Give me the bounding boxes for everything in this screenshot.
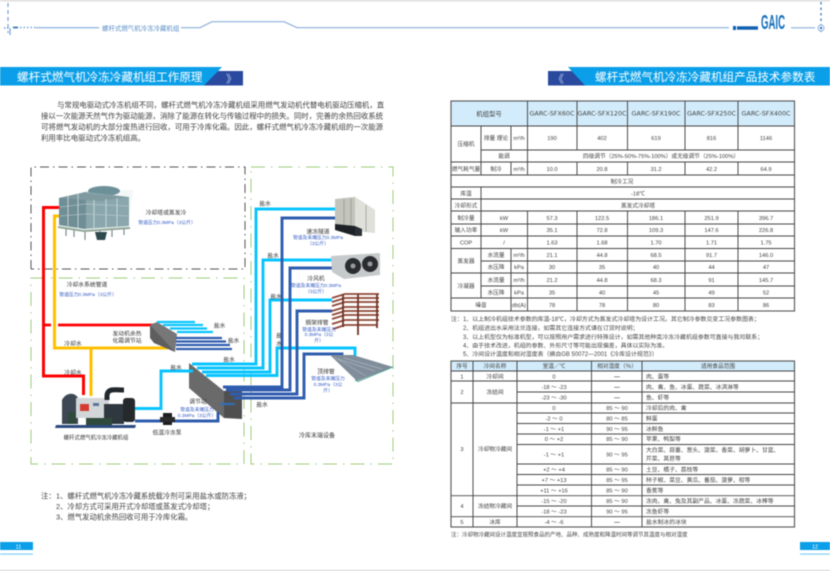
table body values: 水压降 [487, 288, 505, 296]
text block: left notes: 注： [41, 492, 56, 500]
labels: stations and chiller: 调节站 [189, 397, 207, 405]
pipes: cooling water and hot water [44, 208, 168, 396]
labels: terminal equipment: 斤） [323, 387, 333, 394]
labels: terminal equipment: 盐水 [223, 355, 235, 363]
table header row: GARC-SFX400C [742, 110, 791, 118]
table body values: 68.5 [650, 253, 662, 259]
labels: terminal equipment: 顶排管 [317, 367, 335, 375]
second table contents: +2 ～ +4 [543, 468, 565, 474]
table body values: / [503, 240, 505, 246]
heading: left section title bar: 》 [226, 72, 237, 86]
text block: table notes: 1、以上制冷机组技术参数的库温-18℃，冷却方式为蒸发式冷却塔为设计工况。其它制冷参数见变工况参数图表； [463, 315, 760, 323]
text block: table notes: 注： [451, 315, 463, 323]
second table contents: 芹菜、莴苣等 [646, 454, 681, 462]
second table contents: — [614, 396, 620, 402]
table body values: 57.3 [546, 216, 558, 222]
second table contents: 肉、禽、鱼、冰蛋、蔬菜、冰淇淋等 [646, 383, 739, 391]
table body values: db(A) [512, 303, 526, 309]
second table contents: -15 ～ -20 [541, 499, 567, 505]
second table contents: — [614, 385, 620, 391]
table body values: 排量 理论 [484, 134, 508, 142]
icon: shelf coil rack [332, 294, 379, 335]
table body values: 水流量 [487, 276, 505, 284]
table body values: 47 [763, 265, 769, 271]
table body values: 制冷量 [457, 214, 475, 222]
table body values: 86 [763, 303, 769, 309]
second table contents: -1 ～ +1 [544, 427, 564, 433]
table body values: 619 [651, 136, 661, 142]
table body values: 44.8 [596, 253, 608, 259]
second table contents: 2 [460, 390, 464, 396]
table body values: 水压降 [487, 263, 505, 271]
panel: cooling tower zone [31, 167, 245, 269]
table body values: 冷凝器 [457, 282, 475, 290]
labels: terminal equipment: 0.3MPa（3公 [305, 332, 334, 338]
table body values: 1146 [760, 136, 772, 142]
labels: terminal equipment: 冷库末端设备 [299, 431, 335, 439]
table body values: 78 [599, 303, 605, 309]
second table contents: 肉、蛋等 [646, 372, 669, 380]
table body values: 1.75 [760, 240, 772, 246]
labels: terminal equipment: 管道及末端压力 [302, 326, 336, 333]
text block: table notes [451, 315, 763, 358]
second table contents: 室温／℃ [543, 362, 566, 370]
heading: left section title bar [0, 67, 243, 86]
icon: gas engine chiller unit [55, 390, 136, 428]
table body values: kPa [514, 290, 525, 296]
second table contents: 85 ～ 90 [606, 406, 628, 412]
second table contents: 冷却间 [486, 372, 504, 380]
labels: terminal equipment: 盐水 [228, 336, 239, 344]
second table contents: -1 ～ +1 [544, 452, 564, 458]
table body values: 146.0 [759, 253, 773, 259]
labels: cooling zone: 冷却水 [64, 368, 82, 376]
page number: 11 [0, 542, 33, 555]
table body values: kPa [514, 265, 525, 271]
second table contents: 90 ～ 95 [606, 427, 628, 433]
labels: terminal equipment: 水 [276, 339, 282, 347]
table: product technical parameters [451, 101, 794, 311]
table body values: 35 [599, 265, 605, 271]
table body values: 78 [549, 303, 555, 309]
table body values: 压缩机 [457, 140, 475, 148]
text block: table notes: 5、冷间设计温度和相对湿度表（摘自GB 50072—2001《冷库设计规范》） [463, 350, 658, 358]
header: left ornament and running title [4, 3, 729, 35]
table body values: 能调 [498, 152, 510, 160]
text block: table notes: 2、机组进出水采用法兰连接，如需其它连接方式请在订货时说明； [463, 324, 638, 332]
page number: 12: 12 [812, 544, 818, 550]
labels: stations and chiller: 盐水 [170, 363, 182, 371]
second table contents: 4 [460, 504, 464, 510]
second table contents [456, 362, 779, 526]
table body values: 91.7 [706, 253, 717, 259]
second table contents: 土豆、橘子、荔枝等 [646, 466, 698, 474]
second table contents: 柿子椒、菜豆、黄瓜、番茄、菠萝、柑等 [646, 476, 751, 484]
labels: cooling zone: 管道压力0.3MPa（3公斤） [138, 219, 196, 226]
table body values: 输入功率 [455, 226, 478, 234]
table body values: 蒸发器 [457, 257, 475, 265]
table body values: 制冷 [490, 165, 502, 173]
table body values: 蒸发式冷却塔 [621, 202, 655, 210]
second table contents: 冷间名称 [484, 362, 507, 370]
table body values: 1.71 [706, 240, 717, 246]
labels: terminal equipment: 斤） [314, 337, 324, 344]
panel: cold store terminal zone [251, 167, 393, 464]
table header row: GARC-SFX120C [578, 110, 627, 118]
second table contents: 序号 [456, 362, 468, 370]
page number: 12 [800, 542, 830, 555]
second table contents: -23 ～ -30 [541, 396, 567, 402]
second table contents: -18 ～ -23 [541, 510, 567, 516]
table body values: 91 [708, 278, 715, 284]
table body values: 145.7 [759, 278, 773, 284]
table body values: 42.2 [706, 167, 717, 173]
second table contents: 相对湿度（％） [597, 362, 637, 370]
text block: left notes: 2、冷却方式可采用开式冷却塔或蒸发式冷却塔； [56, 502, 214, 511]
labels: terminal equipment: 冷风机 [307, 274, 325, 282]
text block: introduction paragraph: 与常规电驱动式冷冻机组不同，螺杆式燃气机冷冻冷藏机组采用燃气发动机代替电机驱动压缩机，直 [57, 99, 385, 109]
second table contents: 80 ～ 85 [606, 416, 628, 422]
heading: right section title bar [548, 67, 830, 86]
text block: left notes: 1、螺杆式燃气机冷冻冷藏系统载冷剂可采用盐水或防冻液； [56, 492, 251, 500]
table body values: 45 [653, 290, 659, 296]
table body values: 20.8 [596, 167, 608, 173]
table body values: 10.0 [546, 167, 558, 173]
second table contents: +7 ～ +13 [542, 478, 566, 484]
pipes: brine supply [135, 209, 355, 408]
second table contents: 0 [552, 406, 556, 412]
second table contents: 适用食品范围 [701, 362, 735, 370]
table body values: m³/h [513, 167, 525, 173]
icon: low temperature pump [160, 413, 175, 425]
labels: terminal equipment: 0.3MPa（3公 [314, 382, 343, 388]
labels: stations and chiller: 发动机余热 [112, 329, 142, 337]
labels: terminal equipment: 盐水 [270, 292, 282, 300]
second table contents: 5 [460, 520, 464, 526]
labels: cooling zone: 冷却塔或蒸发冷 [146, 208, 186, 216]
text block: introduction paragraph: 可将燃气发动机的大部分废热进行回收，可用于冷库化霜。因此，螺杆式燃气机冷冻冷藏机组的一次能源 [41, 122, 384, 132]
table header row: 机组型号 [476, 109, 502, 118]
table header row: GARC-SFX250C [687, 110, 737, 118]
second table contents: 0 [552, 374, 556, 380]
second table contents: 冻鱼虾等 [646, 508, 669, 516]
second table contents: — [614, 520, 620, 526]
table body values: 40 [653, 265, 659, 271]
table body values: 816 [707, 136, 716, 142]
second table contents: 苹果、鸭梨等 [646, 435, 681, 443]
table body values: 226.8 [759, 228, 773, 234]
table body values: 21.2 [546, 278, 558, 284]
second table contents: 冰鲜鱼 [646, 425, 664, 433]
icon: freezing tunnel unit [335, 197, 375, 236]
text block: introduction paragraph [41, 99, 385, 142]
second table contents: 大白菜、蒜薹、葱头、菠菜、香菜、胡萝卜、甘蓝、 [646, 446, 779, 454]
header: left ornament and running title: 螺杆式燃气机冷冻冷藏机组 [102, 24, 180, 32]
table body values: 251.9 [704, 216, 719, 222]
labels: terminal equipment: 管道及末端压力 [311, 375, 345, 382]
second table contents: 90 ～ 95 [606, 510, 628, 516]
second table contents: 85 ～ 90 [606, 499, 628, 505]
table body values: 1.63 [546, 240, 558, 246]
labels: stations and chiller: 0.3MPa（3公斤） [178, 412, 216, 419]
table body values: -18℃ [631, 190, 645, 198]
text block: table notes: 3、以上机型仅为标准机型，可以按照用户需求进行特殊设计，如需其他种类冷冻冷藏机组参数可直接与我司联系； [463, 333, 763, 341]
icon: ceiling coil [330, 355, 393, 382]
page number: 11: 11 [16, 544, 21, 550]
labels: stations and chiller: 螺杆式燃气机冷冻冷藏机组 [64, 433, 129, 441]
second table contents: 85 ～ 90 [606, 468, 628, 474]
icon: cooling tower [58, 186, 133, 240]
icon: heat recovery regulating station [150, 322, 232, 352]
table body values: 122.5 [595, 216, 609, 222]
second table contents: 冻结间 [486, 388, 504, 396]
table body values: 30 [549, 265, 555, 271]
table body values: 1.70 [650, 240, 662, 246]
labels: cooling zone [59, 208, 196, 376]
second table contents: +11 ～ +16 [540, 488, 568, 494]
table body values: 冷却形式 [455, 202, 478, 210]
header: right logo and ornament: GAIC [761, 12, 785, 34]
second table contents: 85 ～ 90 [606, 437, 628, 443]
table body values [452, 134, 773, 309]
second table contents: 冻结物冷藏间 [478, 502, 512, 510]
table body values: 四级调节（25%-50%-75%-100%）或无级调节（25%-100%） [583, 152, 739, 160]
table body values: 35 [549, 290, 555, 296]
second table contents: 1 [460, 374, 464, 380]
heading: right section title bar: 螺杆式燃气机冷冻冷藏机组产品技术参数表 [595, 70, 816, 84]
table body values: 80 [653, 303, 659, 309]
heading: left section title bar: 螺杆式燃气机冷冻冷藏机组工作原理 [17, 70, 203, 84]
second table contents: 0 ～ +2 [545, 437, 563, 443]
table body values: 186.1 [649, 216, 663, 222]
labels: stations and chiller: 管道及末端压力 [180, 406, 214, 413]
table body values: 制冷工况 [611, 178, 634, 186]
second table contents: 90 ～ 95 [606, 452, 628, 458]
labels: stations and chiller: 低温冷冻泵 [152, 428, 182, 436]
table body values: 燃气耗气量 [452, 165, 481, 173]
second table contents: -2 ～ 0 [545, 416, 563, 422]
table body values: m³/h [513, 278, 525, 284]
labels: terminal equipment: 盐水 [256, 400, 268, 408]
table body values: 44 [708, 265, 715, 271]
labels: cooling zone: 冷却水 [64, 339, 82, 347]
table: cold room design temperature and humidity [451, 361, 794, 527]
table body values: 噪音 [475, 301, 487, 309]
second table contents: 鲜蛋 [646, 414, 658, 422]
table body values: 396.7 [759, 216, 773, 222]
second table contents: -18 ～ -23 [541, 385, 567, 391]
labels: terminal equipment: 搁架排管 [305, 318, 329, 326]
table body values: 83 [708, 303, 715, 309]
labels: terminal equipment: 盐水 [259, 199, 271, 207]
second table contents: 盐水制冰的冰块 [646, 518, 687, 526]
text block: left notes [41, 492, 251, 522]
table body values: 402 [597, 136, 607, 142]
text block: introduction paragraph: 接以一次能源天然气作为驱动能源，消除了能源在转化与传输过程中的损失。同时，完善的余热回收系统 [41, 110, 384, 120]
table body values: 44.8 [596, 278, 608, 284]
table body values: 35.1 [546, 228, 558, 234]
labels: terminal equipment [214, 199, 345, 439]
table body values: 64.9 [760, 167, 772, 173]
second table contents: 鱼、虾等 [646, 394, 669, 402]
labels: terminal equipment: 盐水 [214, 321, 225, 329]
second table contents: 香蕉等 [646, 486, 664, 494]
text block: introduction paragraph: 利用率比电驱动式冷冻机组高。 [41, 132, 145, 142]
labels: cooling zone: 冷却水系统管道 [67, 280, 107, 288]
text block: bottom table note: 注：冷却物冷藏间设计温度宜按照食品的产地、品种、成熟度和降温时间等调节其温度与相对湿度 [451, 530, 688, 538]
second table contents: — [614, 374, 620, 380]
table body values: COP [460, 240, 472, 246]
second table contents: 冰库 [489, 518, 501, 526]
second table contents: -4 ～ -6 [545, 520, 563, 526]
table header row: GARC-SFX190C [632, 110, 681, 118]
labels: terminal equipment: （3公斤） [305, 288, 327, 295]
labels: terminal equipment: （3公斤） [307, 240, 329, 247]
table body values: 190 [547, 136, 557, 142]
labels: terminal equipment: 盐水 [267, 251, 279, 259]
labels: terminal equipment: 管道及末端压力0.3MPa [293, 234, 343, 241]
panel: cooling water system zone [31, 278, 244, 464]
second table contents: 冷却物冷藏间 [478, 445, 512, 453]
labels: terminal equipment: 盐 [276, 331, 282, 339]
text block: left notes: 3、燃气发动机余热回收可用于冷库化霜。 [56, 512, 192, 522]
table body values: 1.68 [596, 240, 608, 246]
table body values: kW [500, 228, 509, 234]
second table contents: 85 ～ 90 [606, 488, 628, 494]
table body values: 147.6 [704, 228, 719, 234]
text block: table notes: 4、由于技术改进，机组的参数、外形尺寸等可能出现偏差，具体以实际为准。 [463, 342, 668, 350]
table body values: 72.8 [596, 228, 608, 234]
second table contents: 85 ～ 95 [606, 478, 628, 484]
table body values: 109.3 [649, 228, 663, 234]
second table contents: 冻肉、禽、兔及其副产品、冰蛋、冻蔬菜、冰棒等 [646, 497, 774, 505]
second table contents: 3 [460, 447, 464, 453]
table body values: m³/h [513, 253, 525, 259]
labels: terminal equipment: 速冻隧道 [306, 227, 330, 235]
table body values: 21.1 [546, 253, 558, 259]
table body values: kW [500, 216, 509, 222]
icon: air cooler [331, 253, 380, 279]
table body values: 68.3 [650, 278, 662, 284]
labels: cooling zone: 管道压力0.3MPa（3公斤） [59, 291, 117, 298]
table body values: m³/h [513, 136, 525, 142]
table body values: 库温 [460, 190, 472, 198]
table body values: 40 [599, 290, 605, 296]
header: right logo and ornament [733, 2, 824, 34]
table body values: 49 [708, 290, 715, 296]
labels: stations and chiller: 化霜调节站 [112, 336, 142, 344]
icon: regulating station [189, 363, 242, 419]
table body values: 52 [763, 290, 769, 296]
table header row: GARC-SFX60C [530, 110, 575, 118]
table body values: 水流量 [487, 251, 505, 259]
pipes: brine return [135, 218, 342, 421]
labels: terminal equipment: 管道及末端压力0.3MPa [291, 282, 341, 289]
table body values: 31.2 [650, 167, 662, 173]
table header row [476, 109, 791, 118]
second table contents: 冷却后的肉、禽 [646, 404, 687, 412]
heading: right section title bar: 《 [553, 72, 564, 86]
labels: stations and chiller [64, 329, 216, 441]
